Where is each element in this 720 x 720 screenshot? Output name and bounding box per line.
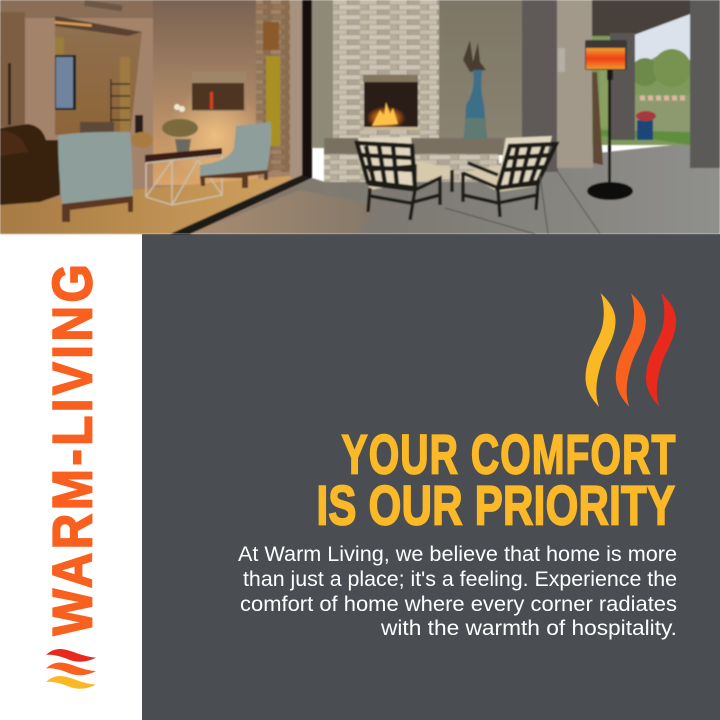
wall art and doorway picture bbox=[55, 55, 246, 131]
left patio chair bbox=[357, 137, 452, 220]
patio floor bbox=[195, 140, 720, 234]
concrete pillars bbox=[522, 0, 593, 172]
dark content panel bbox=[142, 234, 720, 720]
photo: indoor and outdoor living room with patio heater bbox=[0, 0, 720, 234]
right patio chair bbox=[463, 136, 556, 217]
headline bbox=[316, 423, 675, 537]
back wall bbox=[438, 0, 528, 140]
yellow flame bbox=[586, 293, 616, 407]
body paragraph: than just a place; it's a feeling. Experience the bbox=[243, 567, 677, 591]
body paragraph: comfort of home where every corner radiates bbox=[240, 592, 677, 616]
patio ceiling bbox=[592, 0, 720, 36]
yellow wave bbox=[46, 676, 96, 689]
garden view bbox=[592, 10, 692, 145]
body paragraph: At Warm Living, we believe that home is more bbox=[238, 542, 677, 566]
indoor floor bbox=[0, 175, 300, 234]
brand wordmark: WARM-LIVING: WARM-LIVING bbox=[41, 264, 104, 636]
red wave bbox=[46, 649, 96, 662]
left armchair bbox=[58, 132, 133, 222]
outdoor wall bbox=[312, 0, 522, 148]
far and near pillars bbox=[610, 0, 720, 168]
orange flame bbox=[616, 293, 646, 407]
headline: IS OUR PRIORITY bbox=[316, 475, 675, 537]
left white logo panel bbox=[0, 234, 142, 720]
orange wave bbox=[46, 662, 96, 675]
heat flames icon bbox=[586, 293, 676, 407]
sofa bbox=[0, 124, 60, 205]
indoor room background bbox=[0, 0, 305, 234]
side table bbox=[145, 148, 222, 205]
logo waves icon bbox=[46, 649, 96, 689]
flower pot bbox=[636, 111, 656, 140]
right armchair bbox=[200, 122, 271, 188]
back furniture and plant bbox=[80, 104, 198, 152]
vase sculpture bbox=[463, 40, 487, 139]
sliding door track bbox=[170, 175, 312, 234]
patio floor joints bbox=[445, 172, 600, 234]
headline: YOUR COMFORT bbox=[342, 423, 675, 486]
patio heater bbox=[585, 40, 633, 200]
leaning board bbox=[592, 72, 603, 165]
stone fireplace bbox=[324, 0, 504, 182]
body paragraph: with the warmth of hospitality. bbox=[380, 616, 677, 640]
stone column with yellow niche bbox=[256, 0, 312, 178]
red flame bbox=[646, 293, 676, 407]
body paragraph bbox=[238, 542, 677, 640]
